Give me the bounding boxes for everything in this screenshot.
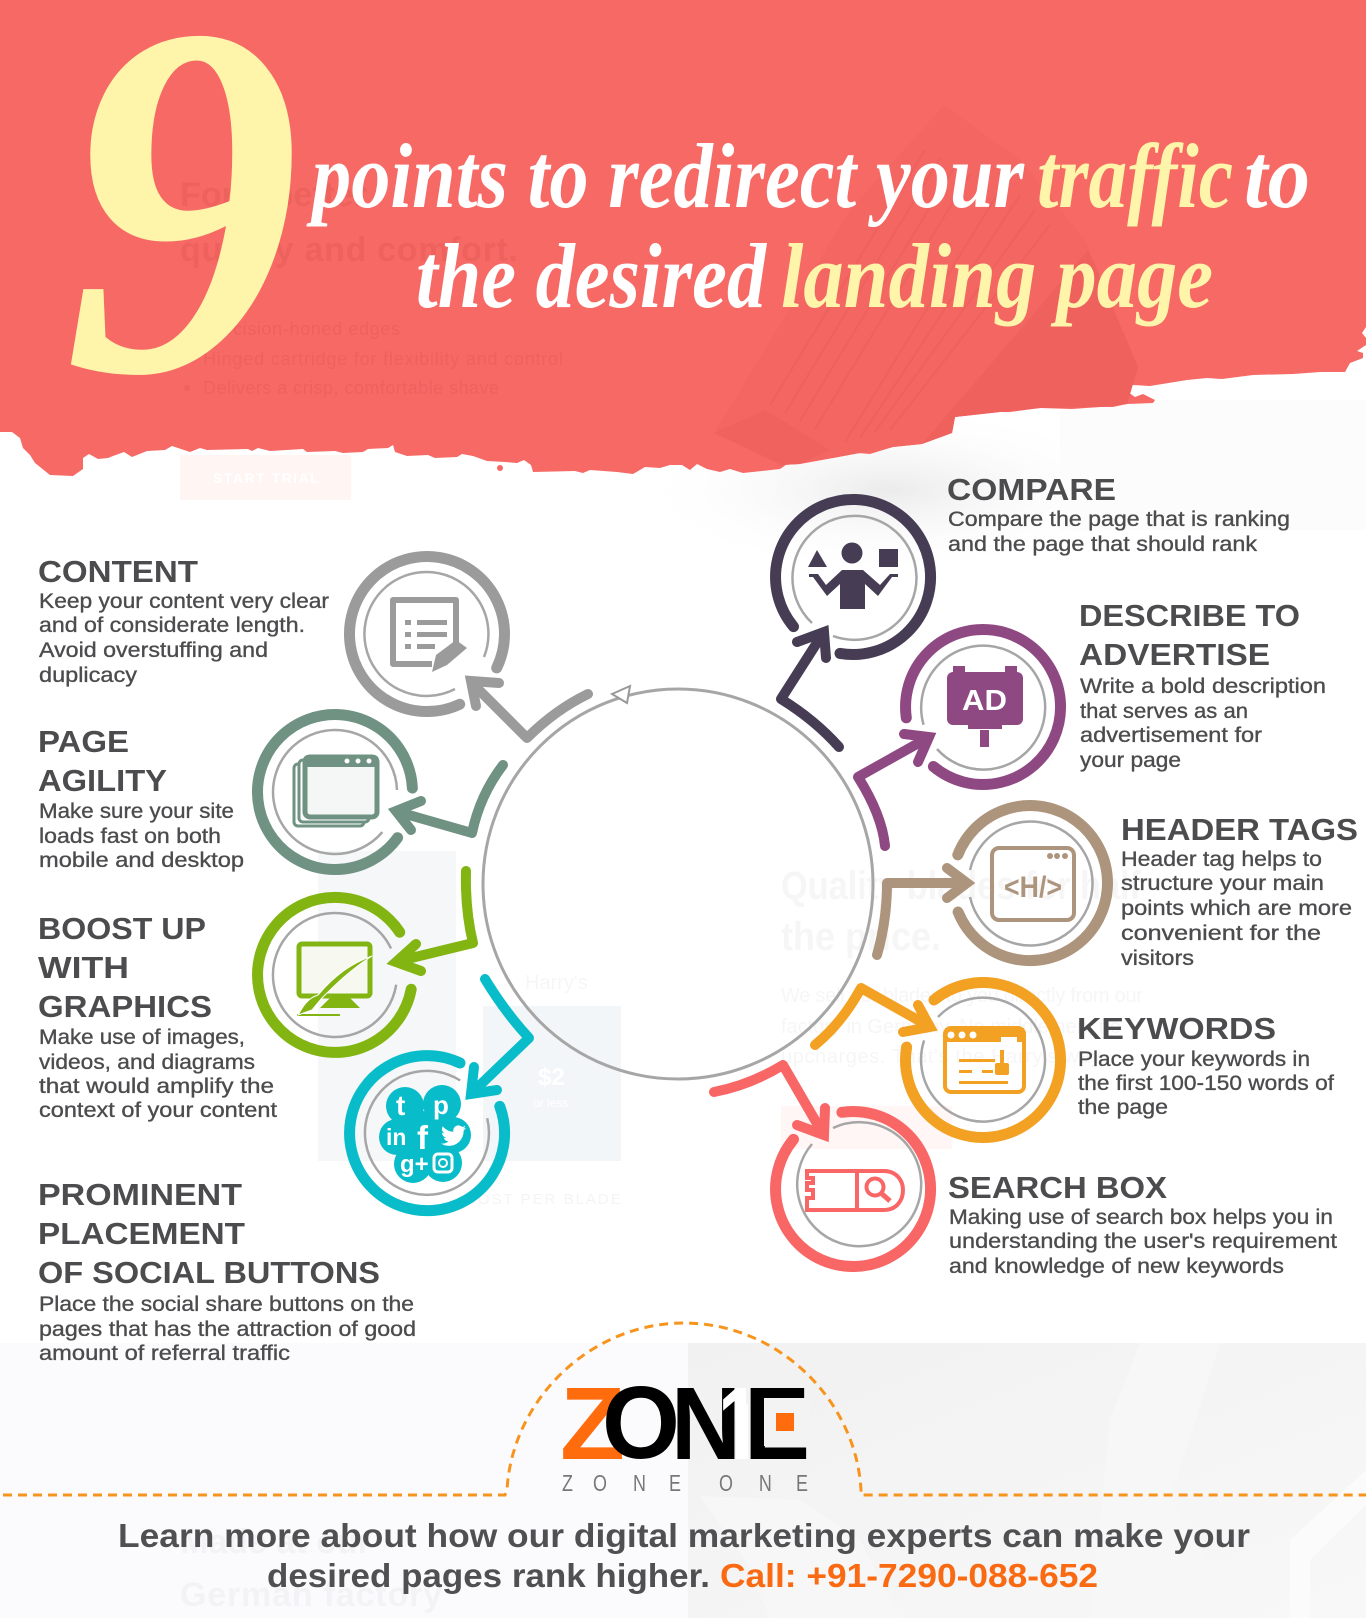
logo: zone one: N bbox=[671, 1366, 741, 1481]
text: boost up with graphics: context of your content bbox=[39, 1099, 277, 1122]
text: content: Keep your content very clear bbox=[39, 590, 329, 613]
text: describe to advertise: advertisement for bbox=[1080, 724, 1262, 747]
ghost header copy bbox=[180, 176, 563, 398]
text: keywords: the page bbox=[1078, 1096, 1168, 1119]
step: page agility bbox=[257, 715, 503, 870]
text: keywords: the first 100-150 words of bbox=[1078, 1072, 1334, 1095]
icon: social cloud bbox=[379, 1085, 471, 1183]
icon: keyword window bbox=[945, 1028, 1024, 1092]
step: describe to advertise bbox=[858, 629, 1061, 846]
text: page agility: Make sure your site bbox=[39, 800, 234, 823]
text: content: Avoid overstuffing and bbox=[39, 639, 268, 662]
text: page agility: mobile and desktop bbox=[39, 849, 244, 872]
icon: document with pencil bbox=[393, 600, 467, 672]
text: prominent placement of social buttons: OF SOCIAL BUTTONS bbox=[38, 1255, 380, 1290]
open arrowhead on circle bbox=[612, 686, 630, 703]
text: page agility: AGILITY bbox=[38, 763, 167, 798]
text: boost up with graphics: videos, and diagrams bbox=[39, 1051, 255, 1074]
text: header tags: convenient for the bbox=[1121, 922, 1321, 945]
faint ghost panels behind chart: Harry's bbox=[525, 972, 588, 994]
faint ghost panels behind chart: or less bbox=[533, 1096, 568, 1110]
text: prominent placement of social buttons: PROMINENT bbox=[38, 1177, 242, 1212]
title: to bbox=[1244, 125, 1310, 227]
text: prominent placement of social buttons: Place the social share buttons on the bbox=[39, 1293, 414, 1316]
text: header tags: points which are more bbox=[1121, 897, 1352, 920]
text: header tags: Header tag helps to bbox=[1121, 848, 1322, 871]
icon: search box bbox=[807, 1171, 903, 1210]
step: compare bbox=[776, 500, 931, 747]
text: content: CONTENT bbox=[38, 554, 198, 589]
ghost header copy: quality and comfort. bbox=[180, 231, 518, 269]
text: describe to advertise: Write a bold description bbox=[1080, 675, 1326, 698]
faint ghost panels behind chart: We sell our blades to you directly from our bbox=[781, 985, 1143, 1007]
step: social buttons bbox=[350, 979, 529, 1211]
text: page agility: loads fast on both bbox=[39, 825, 221, 848]
text: search box: understanding the user's requirement bbox=[949, 1230, 1337, 1253]
icon: monitor and paintbrush bbox=[297, 944, 372, 1015]
text: content: duplicacy bbox=[39, 664, 138, 687]
text: keywords: Place your keywords in bbox=[1078, 1048, 1310, 1071]
text: search box: Making use of search box helps you in bbox=[949, 1206, 1333, 1229]
logo: zone one: E bbox=[744, 1366, 810, 1481]
footer call to action: Learn more about how our digital marketing experts can make your bbox=[118, 1517, 1250, 1554]
text: search box: and knowledge of new keywords bbox=[949, 1255, 1284, 1278]
footer call to action bbox=[118, 1517, 1250, 1594]
icon: AD billboard bbox=[947, 666, 1023, 747]
ghost header copy: Hinged cartridge for flexibility and control bbox=[203, 349, 563, 369]
faint ghost panels behind chart: upcharges. That's the Harry's way bbox=[781, 1046, 1101, 1068]
logo: zone one: 1 bbox=[718, 1366, 760, 1481]
text: page agility bbox=[38, 724, 244, 872]
text: keywords bbox=[1077, 1011, 1334, 1119]
text: boost up with graphics: BOOST UP bbox=[38, 911, 206, 946]
text: header tags: HEADER TAGS bbox=[1121, 812, 1358, 847]
text: prominent placement of social buttons: amount of referral traffic bbox=[39, 1342, 290, 1365]
text: boost up with graphics: WITH bbox=[38, 950, 129, 985]
text: keywords: KEYWORDS bbox=[1077, 1011, 1276, 1046]
logo: zone one: O bbox=[602, 1365, 680, 1480]
title: landing page bbox=[781, 225, 1213, 327]
title: points to redirect your bbox=[306, 125, 1025, 227]
logo: zone one: Z bbox=[560, 1366, 625, 1481]
footer background panel: Made at our bbox=[180, 1523, 371, 1561]
text: header tags: structure your main bbox=[1121, 872, 1324, 895]
logo: zone one bbox=[562, 1386, 808, 1491]
faint ghost panels behind chart bbox=[180, 455, 1143, 1208]
step: boost up with graphics bbox=[258, 871, 473, 1052]
faint ghost panels behind chart: Quality blades for half bbox=[781, 864, 1142, 908]
text: boost up with graphics: that would amplify the bbox=[39, 1075, 274, 1098]
ghost header copy: For a better bbox=[180, 176, 367, 214]
footer call to action: Call: +91-7290-088-652 bbox=[720, 1557, 1098, 1594]
text: compare: Compare the page that is ranking bbox=[948, 508, 1290, 531]
footer call to action: desired pages rank higher. bbox=[267, 1557, 710, 1594]
text: header tags bbox=[1121, 812, 1358, 970]
text: search box bbox=[948, 1170, 1337, 1278]
step: search box bbox=[714, 1065, 931, 1266]
text: prominent placement of social buttons: pages that has the attraction of good bbox=[39, 1318, 416, 1341]
text: page agility: PAGE bbox=[38, 724, 129, 759]
faint ghost panels behind chart: $2 bbox=[538, 1064, 565, 1091]
central circle bbox=[483, 686, 873, 1079]
icon: person weighing shapes bbox=[808, 542, 898, 609]
logo: zone one: ZONE ONE bbox=[562, 1471, 808, 1497]
text: header tags: visitors bbox=[1121, 947, 1194, 970]
text: search box: SEARCH BOX bbox=[948, 1170, 1167, 1205]
text: describe to advertise: ADVERTISE bbox=[1079, 637, 1270, 672]
text: compare bbox=[947, 472, 1290, 556]
text: compare: COMPARE bbox=[947, 472, 1116, 507]
faint ghost panels behind chart: START TRIAL bbox=[213, 470, 320, 486]
icon: social cloud: g+ bbox=[400, 1151, 429, 1178]
text: describe to advertise: your page bbox=[1080, 749, 1181, 772]
faint ghost panels behind chart: COST PER BLADE bbox=[465, 1191, 623, 1208]
text: describe to advertise: DESCRIBE TO bbox=[1079, 598, 1300, 633]
faint ghost panels behind chart: the price. bbox=[781, 915, 941, 959]
faint background photo behind header bbox=[630, 400, 1366, 575]
step: header tags bbox=[877, 806, 1107, 961]
text: describe to advertise: that serves as an bbox=[1080, 700, 1248, 723]
ghost header copy: Precision-honed edges bbox=[203, 319, 400, 339]
title: traffic bbox=[1037, 125, 1233, 227]
text: boost up with graphics: GRAPHICS bbox=[38, 989, 212, 1024]
text: describe to advertise bbox=[1079, 598, 1326, 772]
footer background panel bbox=[0, 1343, 1366, 1618]
dashed orange footer divider with arc bbox=[3, 1323, 1366, 1495]
icon: header tag window: <H/> bbox=[1004, 871, 1062, 904]
icon: social cloud: t bbox=[396, 1090, 405, 1121]
ghost razor bbox=[714, 105, 1138, 465]
title bbox=[306, 125, 1310, 327]
title: the desired bbox=[416, 225, 768, 327]
footer background panel: German factory bbox=[180, 1576, 442, 1614]
text: prominent placement of social buttons bbox=[38, 1177, 416, 1365]
text: compare: and the page that should rank bbox=[948, 533, 1258, 556]
ghost header copy: Delivers a crisp, comfortable shave bbox=[203, 378, 499, 398]
text: boost up with graphics bbox=[38, 911, 277, 1122]
icon: stacked browser windows bbox=[294, 755, 379, 826]
icon: social cloud: f bbox=[417, 1119, 429, 1156]
faint ghost panels behind chart: factory in Germany. No middlemen, no bbox=[781, 1016, 1121, 1038]
icon: header tag window bbox=[992, 848, 1074, 920]
step: content bbox=[349, 557, 588, 738]
text: content: and of considerate length. bbox=[39, 614, 305, 637]
text: content bbox=[38, 554, 329, 687]
step: keywords bbox=[815, 983, 1061, 1138]
text: prominent placement of social buttons: PLACEMENT bbox=[38, 1216, 245, 1251]
icon: social cloud: p bbox=[433, 1090, 449, 1120]
text: boost up with graphics: Make use of images, bbox=[39, 1026, 245, 1049]
icon: social cloud: in bbox=[386, 1124, 406, 1150]
header torn coral banner bbox=[0, 0, 1366, 476]
icon: AD billboard: AD bbox=[962, 685, 1007, 717]
